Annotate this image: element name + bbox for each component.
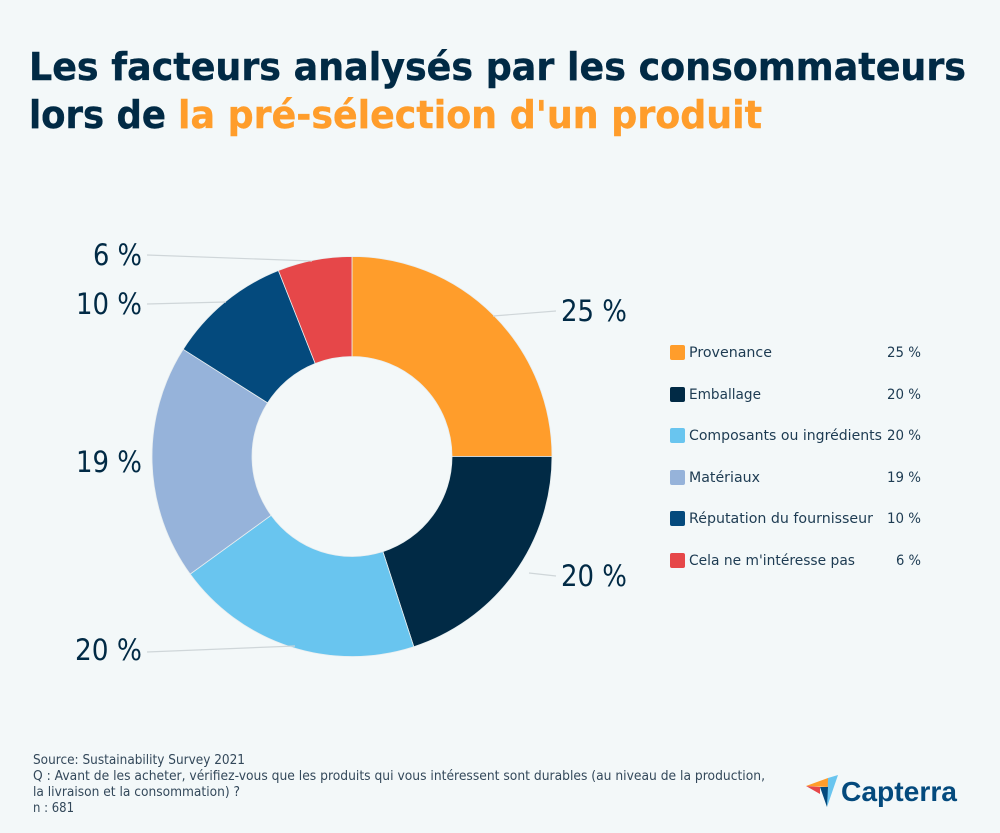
title: Les facteurs analysés par les consommateurs bbox=[29, 45, 966, 90]
legend row: Emballage: 20 % bbox=[887, 387, 921, 403]
legend row: Cela ne m'intéresse pas bbox=[670, 553, 921, 569]
segment: Emballage 20 % bbox=[383, 456, 552, 647]
legend row: Composants ou ingrédients: Composants ou ingrédients bbox=[689, 428, 882, 444]
legend row: Emballage bbox=[670, 387, 921, 403]
segment: Provenance 25 % bbox=[352, 256, 552, 456]
source note: Source: Sustainability Survey 2021 bbox=[33, 753, 245, 768]
legend row: Réputation du fournisseur: 10 % bbox=[887, 511, 921, 527]
donut chart bbox=[152, 256, 552, 656]
legend row: Provenance: 25 % bbox=[887, 345, 921, 361]
source note: n : 681 bbox=[33, 801, 74, 816]
segment: Matériaux 19 % bbox=[152, 349, 271, 574]
logo: Capterra: Capterra bbox=[841, 776, 957, 807]
leader lines bbox=[147, 255, 556, 652]
percentage labels: 20 % bbox=[75, 633, 142, 667]
percentage labels: 19 % bbox=[76, 445, 142, 479]
source note: Q : Avant de les acheter, vérifiez-vous que les produits qui vous intéressent sont durables (au niveau de la production, bbox=[33, 769, 765, 784]
legend row: Matériaux: Matériaux bbox=[689, 470, 760, 486]
legend row: Provenance: Provenance bbox=[689, 345, 772, 361]
icon: Capterra arrow bbox=[806, 775, 838, 807]
source note: la livraison et la consommation) ? bbox=[33, 785, 240, 800]
legend row: Composants ou ingrédients: 20 % bbox=[887, 428, 921, 444]
percentage labels: 10 % bbox=[76, 287, 142, 321]
percentage labels: 25 % bbox=[561, 294, 627, 328]
title: la pré-sélection d'un produit bbox=[178, 93, 762, 138]
title: lors de bbox=[29, 93, 166, 138]
legend row: Cela ne m'intéresse pas: Cela ne m'intéresse pas bbox=[689, 553, 855, 569]
legend row: Matériaux bbox=[670, 470, 921, 486]
percentage labels: 20 % bbox=[561, 559, 627, 593]
legend row: Provenance bbox=[670, 345, 921, 361]
legend row: Emballage: Emballage bbox=[689, 387, 761, 403]
segment: Cela ne m'intéresse pas 6 % bbox=[278, 256, 352, 364]
percentage labels bbox=[75, 238, 627, 667]
percentage labels: 6 % bbox=[93, 238, 142, 272]
segment: Composants ou ingrédients 20 % bbox=[190, 515, 414, 656]
segment: Réputation du fournisseur 10 % bbox=[183, 270, 315, 403]
legend row: Cela ne m'intéresse pas: 6 % bbox=[896, 553, 921, 569]
source note bbox=[33, 753, 765, 816]
legend row: Réputation du fournisseur: Réputation du fournisseur bbox=[689, 511, 873, 527]
title bbox=[29, 45, 966, 138]
legend bbox=[670, 345, 921, 569]
legend row: Matériaux: 19 % bbox=[887, 470, 921, 486]
